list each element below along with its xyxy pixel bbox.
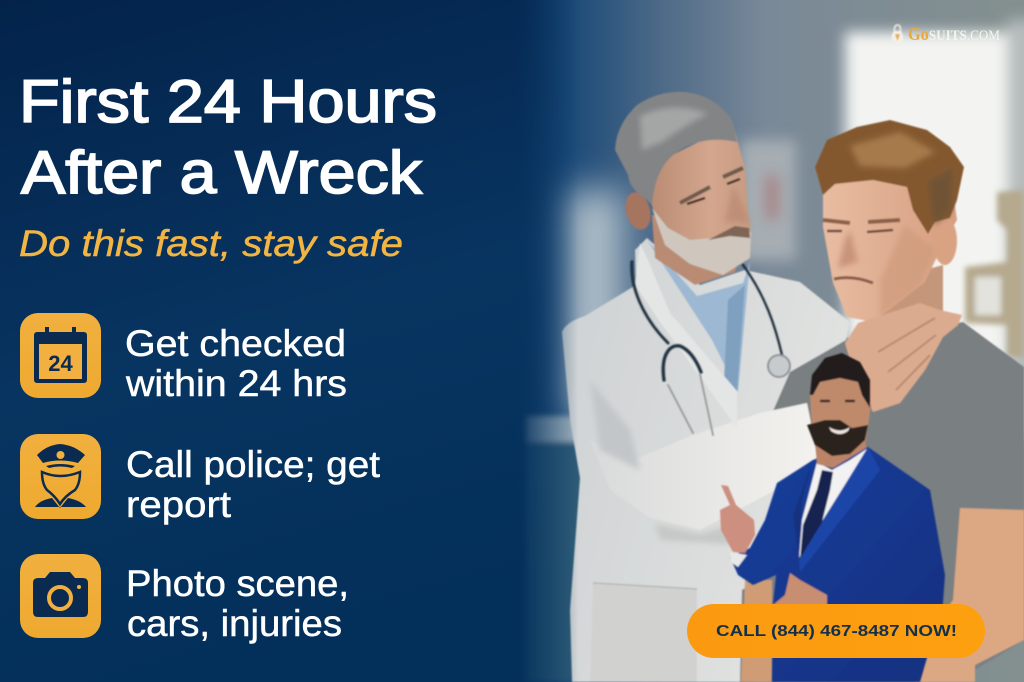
step 1 text: Get checked [125,323,346,364]
icon: calendar 24 [20,313,101,398]
patient hair [815,120,964,234]
call to action button: CALL (844) 467-8487 NOW! [716,623,957,640]
icon: logo lock [892,25,903,44]
step 2: call police [20,434,381,525]
doctor hand on neck [845,303,962,412]
doctor hair [615,92,737,205]
title: After a Wreck [21,139,423,206]
patient shirt [740,322,1024,682]
doctor sleeve [590,403,818,530]
doctor beard [652,208,751,275]
doctor ear [621,190,655,232]
doctor brows and eyes [680,168,743,203]
patient neck [870,265,943,350]
patient brows, eyes and mouth [823,220,900,223]
attorney hair [810,353,870,408]
doctor mustache [708,226,750,240]
step 3: photo scene [20,554,349,644]
step 2 text: report [126,484,232,525]
step 3 text: cars, injuries [127,603,342,644]
coat fold shading [590,380,740,545]
patient other arm [741,580,772,682]
doctor neck [652,215,748,285]
logo text: GoSUITS.COM [908,24,1000,44]
title: First 24 Hours [19,68,437,135]
step 1 text [125,323,347,404]
step 2 text: Call police; get [126,444,381,485]
left navy panel [0,0,600,682]
stethoscope [632,262,782,435]
doctor shirt [647,240,750,392]
doctor face [648,125,751,274]
attorney cuff [730,552,747,567]
icon: police officer [20,434,101,519]
logo: GoSuits.com [892,24,1000,44]
attorney eyes [820,400,855,402]
step 3 text: Photo scene, [126,563,349,604]
attorney pointing hand [720,485,755,553]
doctor nose [725,185,750,222]
icon: calendar 24: 24 [48,351,73,376]
doctor lapel [635,243,737,428]
attorney lapels [799,447,880,572]
icon: camera [20,554,101,638]
subtitle: Do this fast, stay safe [19,223,403,264]
step 3 text [126,563,349,644]
background: blurred clinic room [500,0,1024,682]
attorney dress shirt [799,448,868,558]
attorney suit [730,447,945,682]
patient face [823,150,957,322]
patient arm [915,508,1024,682]
patient nose shadow [838,225,935,318]
attorney portrait [720,353,945,682]
step 1 text: within 24 hrs [125,363,347,404]
patient ear [933,217,957,265]
doctor pocket [590,583,697,682]
step 2 text [126,444,381,525]
attorney neck and head [815,430,866,468]
call to action button [687,604,985,658]
attorney beard [807,420,868,456]
attorney lower hand [773,573,827,605]
illustration: doctor examining patient [562,92,1024,682]
title [19,68,437,206]
attorney tie [800,470,833,560]
step 1: get checked [20,313,347,404]
doctor white coat [562,238,850,682]
